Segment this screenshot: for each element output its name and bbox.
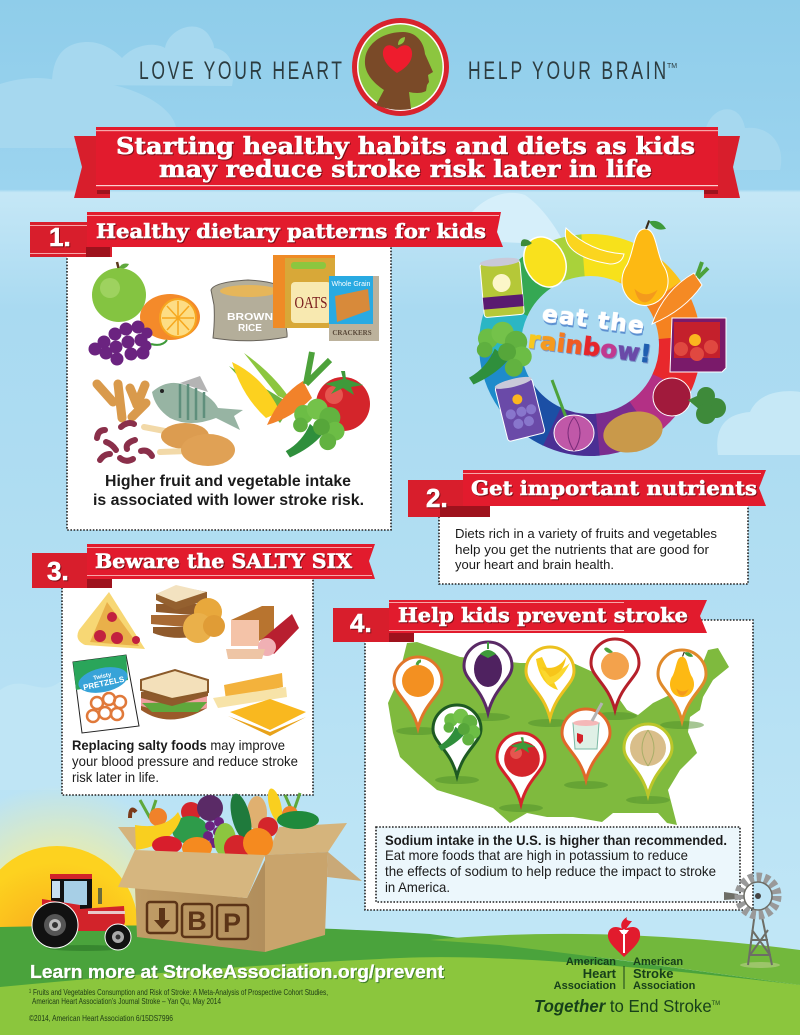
tractor rear wheel [32, 902, 78, 948]
call to action: Learn more at StrokeAssociation.org/prevent [30, 961, 444, 982]
left box face [135, 860, 265, 952]
icon: canned vegetables [479, 256, 524, 318]
text: replacing salty foods: Replacing salty foods may improve [72, 737, 285, 753]
icon: carrot [267, 352, 330, 425]
produce in box [130, 787, 319, 861]
icon: onion [552, 380, 594, 451]
AHA wordmark: American [566, 956, 616, 968]
section 3 heading ribbon: Beware the SALTY SIX [95, 549, 352, 573]
icon: sandwich [141, 670, 208, 720]
section 4 heading ribbon: Help kids prevent stroke [398, 603, 688, 627]
text: nutrients description: help you get the nutrients that are good for [455, 542, 710, 557]
text: nutrients description: your heart and brain health. [455, 557, 614, 572]
section 2 heading ribbon: Get important nutrients [471, 476, 757, 500]
title text: Starting healthy habits and diets as kids [116, 133, 695, 160]
icon: cheese [213, 673, 306, 736]
right box face [265, 852, 328, 952]
icon: brown rice bag: RICE [238, 323, 262, 334]
icon: pretzel bag: PRETZELS [82, 675, 126, 692]
section 2 heading ribbon: 2. [426, 483, 448, 513]
icon: whole grain crackers [329, 276, 379, 341]
footnotes: ©2014, American Heart Association 6/15DS7996 [29, 1013, 173, 1023]
tractor cab [50, 874, 92, 909]
icon: bread stack and rolls [151, 585, 225, 643]
callout: sodium intake: Sodium intake in the U.S. is higher than recommended. [385, 833, 727, 848]
box stamp: down arrow [147, 902, 177, 933]
icon: peanuts [97, 384, 146, 418]
section 3 heading ribbon: 3. [47, 556, 69, 586]
front flap [118, 850, 265, 898]
title ribbon [74, 127, 740, 198]
icon: grapes [88, 320, 167, 366]
text: higher fruit and vegetable intake [93, 473, 364, 509]
pin: pear [658, 650, 706, 721]
icon: apple [92, 262, 146, 322]
callout: sodium intake: in America. [385, 880, 450, 895]
icon: tomato [316, 371, 370, 431]
tagline: TM [712, 1001, 720, 1007]
rainbow ring [465, 220, 715, 470]
icon: carrot [652, 262, 708, 324]
box stamp: B [182, 904, 212, 937]
icon: heart and torch [608, 917, 640, 957]
text: replacing salty foods [72, 737, 298, 785]
pin: orange [394, 657, 442, 728]
section 1 heading ribbon [30, 212, 503, 257]
pin: peach [591, 639, 639, 710]
pin: tomato [497, 733, 545, 804]
tagline: Together to End Stroke [534, 996, 716, 1016]
title text [116, 133, 695, 183]
icon: canned berries [494, 374, 545, 442]
footnotes: ¹ Fruits and Vegetables Consumption and Risk of Stroke: A Meta-Analysis of Prospective Cohort Studies, [29, 987, 328, 997]
sun [0, 785, 200, 1035]
AHA wordmark: Association [554, 980, 616, 992]
callout: sodium intake: the effects of sodium to help reduce the impact to stroke [385, 864, 716, 879]
icon: pretzel bag [73, 655, 139, 733]
AHA wordmark: Heart [583, 966, 617, 981]
panel 4: help kids prevent stroke [365, 620, 753, 910]
pin: melon [624, 724, 672, 795]
callout: sodium intake [376, 827, 740, 902]
right flap [327, 852, 362, 881]
footnotes: American Heart Association’s Journal Stroke – Yan Qu, May 2014 [32, 996, 221, 1006]
clouds [0, 27, 800, 790]
American Heart and Stroke Association logo [534, 917, 720, 1016]
text: replacing salty foods: your blood pressure and reduce stroke [72, 753, 298, 769]
icon: chicken legs [144, 423, 235, 466]
pin: broccoli [433, 705, 481, 776]
title text: may reduce stroke risk later in life [159, 156, 652, 183]
icon: kidney beans [97, 423, 152, 461]
tractor [32, 874, 131, 951]
text: eat the rainbow: rainbow! [527, 326, 653, 368]
panel 1: healthy dietary patterns [67, 245, 391, 530]
text: nutrients description: Diets rich in a variety of fruits and vegetables [455, 526, 717, 541]
rainbow food wheel [465, 220, 726, 470]
icon: potato [599, 406, 667, 458]
section 4 heading ribbon: 4. [350, 608, 372, 638]
box stamp: P: P [223, 908, 241, 938]
ASA wordmark: American [633, 956, 683, 968]
icon: broccoli [469, 322, 532, 384]
text: higher fruit and vegetable intake: is associated with lower stroke risk. [93, 492, 364, 509]
icon: broccoli [286, 399, 345, 457]
icon: oats box [273, 255, 335, 328]
header: love your heart: LOVE YOUR HEART [139, 56, 342, 85]
ASA wordmark: Association [633, 980, 696, 992]
back flaps [118, 823, 347, 855]
text: eat the rainbow [527, 301, 653, 368]
ASA wordmark [633, 956, 696, 992]
header: help your brain: HELP YOUR BRAIN [468, 56, 666, 85]
pin: banana [526, 647, 574, 718]
ground hills [0, 926, 800, 1035]
icon: brown rice bag: BROWN [227, 312, 273, 323]
icon: pear [622, 220, 668, 306]
tractor body [42, 899, 125, 931]
windmill [724, 877, 780, 968]
icon: lemon [516, 230, 574, 294]
icon: deli meats [226, 606, 299, 659]
icon: banana [565, 228, 624, 264]
section 2 heading ribbon [408, 470, 766, 517]
text: replacing salty foods: risk later in life. [72, 769, 159, 785]
pin: yogurt [562, 703, 610, 780]
tractor front wheel [105, 924, 131, 950]
section 4 heading ribbon [333, 600, 707, 642]
text: higher fruit and vegetable intake: Higher fruit and vegetable intake [105, 473, 351, 490]
callout: sodium intake: Eat more foods that are high in potassium to reduce [385, 848, 688, 863]
icon: corn [229, 353, 292, 423]
produce box with BP label [118, 787, 362, 952]
box stamp: B: B [187, 906, 207, 936]
icon: tomato carton [670, 318, 726, 372]
AHA wordmark [554, 956, 617, 992]
icon: brown rice bag [211, 280, 288, 341]
pin shadows [396, 712, 704, 812]
icon: pretzel bag: Twisty [93, 672, 113, 682]
logo: head with heart-apple [352, 18, 449, 116]
icon: oats box: OATS [294, 293, 328, 312]
section 3 heading ribbon [32, 544, 375, 588]
panel 3: beware the salty six [62, 578, 313, 795]
icon: fish [152, 376, 243, 430]
header: help your brain: TM [667, 63, 677, 70]
ASA wordmark: Stroke [633, 966, 673, 981]
icon: orange [140, 294, 200, 340]
icon: pizza [77, 592, 145, 649]
text: eat the rainbow: eat the [541, 301, 647, 340]
icon: beet [653, 378, 726, 424]
footnotes [29, 987, 328, 1023]
pin: eggplant [464, 642, 512, 713]
icon: whole grain crackers: CRACKERS [332, 329, 372, 337]
text: nutrients description [455, 526, 717, 572]
panel 2: get important nutrients [439, 503, 748, 584]
section 1 heading ribbon: 1. [49, 222, 71, 252]
icon: whole grain crackers: Whole Grain [332, 281, 371, 288]
section 1 heading ribbon: Healthy dietary patterns for kids [96, 219, 486, 243]
box stamp: P [217, 905, 248, 939]
map: United States [388, 642, 729, 825]
